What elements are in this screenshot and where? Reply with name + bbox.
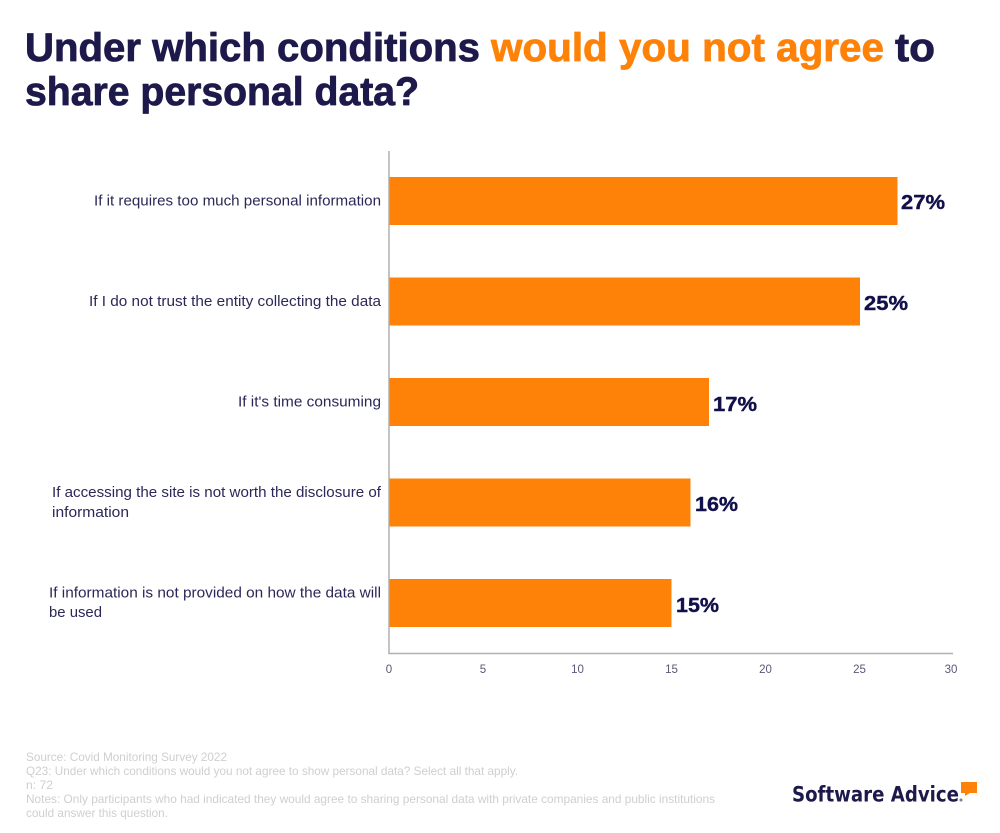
logo icon: speech bubble [961,782,977,796]
axes [389,151,953,654]
bars [390,177,898,627]
logo mark dot [960,798,962,802]
x axis ticks: 10 [571,664,584,676]
category labels: If information is not provided on how the data will [49,586,381,602]
source notes: Source: Covid Monitoring Survey 2022 [26,750,227,764]
title: would you not agree [490,26,884,70]
title: share personal data? [25,70,419,114]
value labels: 27% [901,192,945,214]
value labels [676,192,945,617]
source notes: n: 72 [26,778,53,792]
title: to [895,26,935,70]
logo: Software Advice [792,782,977,806]
x axis ticks [386,664,957,676]
x axis ticks: 15 [665,664,678,676]
x axis ticks: 5 [480,664,486,676]
x axis ticks: 25 [853,664,866,676]
category labels: If it's time consuming [238,394,381,410]
x axis ticks: 0 [386,664,392,676]
value labels: 25% [864,293,908,315]
title: Under which conditions [25,26,480,70]
value labels: 15% [676,595,719,617]
title [25,26,935,114]
source notes: Notes: Only participants who had indicated they would agree to sharing personal data with private companies and public institutions [26,792,715,806]
bar chart [49,151,957,676]
category labels: information [52,505,129,521]
category labels: be used [49,605,102,621]
category labels: If accessing the site is not worth the disclosure of [52,485,382,501]
source notes: Q23: Under which conditions would you not agree to show personal data? Select all that apply. [26,764,518,778]
value labels: 17% [713,394,757,416]
x axis ticks: 20 [759,664,772,676]
logo wordmark: Software Advice [792,782,959,806]
x axis ticks: 30 [945,664,957,676]
source notes [26,750,715,820]
category labels: If it requires too much personal information [94,194,381,210]
source notes: could answer this question. [26,806,168,820]
category labels: If I do not trust the entity collecting the data [89,294,382,310]
value labels: 16% [695,494,738,516]
category labels [49,194,382,621]
